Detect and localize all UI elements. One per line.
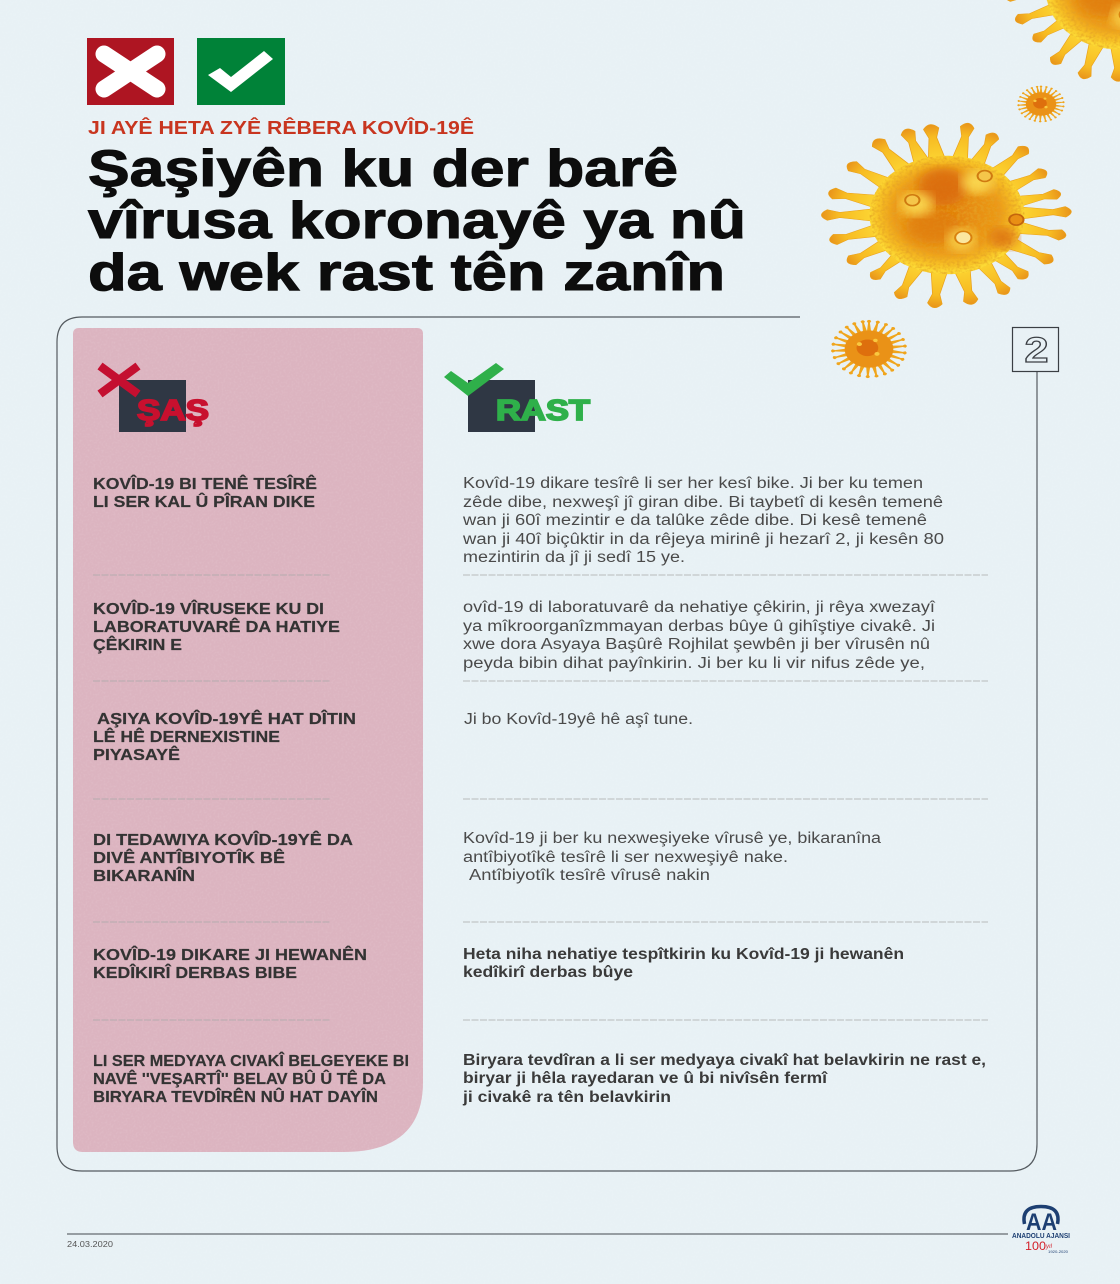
row 1 right: wan ji 40î biçûktir in da rêjeya mirinê ji hezarî 2, ji kesên 80 bbox=[462, 531, 944, 548]
title: da wek rast tên zanîn bbox=[88, 244, 725, 302]
panel: pink wrong column bbox=[73, 328, 423, 1152]
row 6 right: biryar ji hêla rayedaran ve û bi nivîsên fermî bbox=[463, 1070, 828, 1087]
heading: ŞAŞ: ŞAŞ bbox=[137, 395, 209, 427]
row 6 right: Biryara tevdîran a li ser medyaya civakî hat belavkirin ne rast e, bbox=[463, 1052, 986, 1069]
footer line bbox=[67, 1233, 1008, 1235]
row 2 wrong: KOVÎD-19 VÎRUSEKE KU DI bbox=[93, 600, 324, 618]
row 4 wrong: BIKARANÎN bbox=[93, 867, 195, 885]
row 2 right bbox=[463, 599, 936, 672]
row 4 right: Antîbiyotîk tesîrê vîrusê nakin bbox=[469, 867, 710, 884]
icon: virus top right bbox=[980, 0, 1120, 101]
row 6 right: ji civakê ra tên belavkirin bbox=[462, 1089, 671, 1106]
row 3 right: Ji bo Kovîd-19yê hê aşî tune. bbox=[464, 711, 693, 728]
row 3 wrong bbox=[93, 710, 356, 764]
row 1 right: mezintirin da jî ji sedî 15 ye. bbox=[463, 549, 685, 566]
icon: red cross bbox=[87, 38, 174, 105]
icon: green check bbox=[197, 38, 285, 105]
row 5 right: Heta niha nehatiye tespîtkirin ku Kovîd-19 ji hewanên bbox=[463, 946, 904, 963]
logo: Anadolu Ajansi: ANADOLU AJANSI bbox=[1012, 1233, 1070, 1240]
row 6 wrong: BIRYARA TEVDÎRÊN NÛ HAT DAYÎN bbox=[93, 1088, 378, 1106]
row 2 right: ovîd-19 di laboratuvarê da nehatiye çêkirin, ji rêya xwezayî bbox=[463, 599, 936, 616]
row 3 wrong: AŞIYA KOVÎD-19YÊ HAT DÎTIN bbox=[97, 710, 356, 728]
page number box: 2 bbox=[1024, 331, 1048, 370]
row 2 right: peyda bibin dihat payînkirin. Ji ber ku li vir nifus zêde ye, bbox=[463, 655, 925, 672]
row 2 wrong: ÇÊKIRIN E bbox=[93, 636, 182, 654]
icon: virus large bbox=[821, 122, 1072, 308]
row 1 right: wan ji 60î mezintir e da talûke zêde dibe. Di kesê temenê bbox=[462, 512, 927, 529]
logo: Anadolu Ajansi: 1920-2020 bbox=[1048, 1250, 1068, 1254]
row 1 right: Kovîd-19 dikare tesîrê li ser her kesî bike. Ji ber ku temen bbox=[463, 475, 923, 492]
row 4 right: Kovîd-19 ji ber ku nexweşiyeke vîrusê ye, bikaranîna bbox=[463, 830, 881, 847]
title: vîrusa koronayê ya nû bbox=[88, 192, 746, 250]
row 6 wrong: NAVÊ ''VEŞARTÎ'' BELAV BÛ Û TÊ DA bbox=[93, 1070, 386, 1088]
logo: Anadolu Ajansi: 100 bbox=[1025, 1239, 1046, 1253]
row 1 right bbox=[462, 475, 944, 566]
logo: Anadolu Ajansi bbox=[1012, 1206, 1070, 1254]
row 2 right: ya mîkroorganîzmmayan derbas bûye û gihîştiye civakê. Ji bbox=[463, 618, 935, 635]
row 3 wrong: PIYASAYÊ bbox=[93, 746, 180, 764]
heading: RAST: RAST bbox=[496, 395, 590, 427]
title bbox=[88, 140, 746, 302]
row 5 wrong: KOVÎD-19 DIKARE JI HEWANÊN bbox=[93, 946, 367, 964]
row 1 wrong bbox=[93, 475, 317, 511]
row 4 wrong: DI TEDAWIYA KOVÎD-19YÊ DA bbox=[93, 831, 353, 849]
row 6 wrong: LI SER MEDYAYA CIVAKÎ BELGEYEKE BI bbox=[93, 1052, 409, 1070]
heading: ŞAŞ bbox=[100, 366, 209, 432]
page number box bbox=[1012, 328, 1058, 372]
panel frame bbox=[57, 317, 1037, 1171]
heading: RAST bbox=[444, 363, 590, 432]
title: Şaşiyên ku der barê bbox=[88, 140, 678, 198]
row 5 wrong: KEDÎKIRÎ DERBAS BIBE bbox=[93, 964, 297, 982]
logo: Anadolu Ajansi: yıl bbox=[1045, 1244, 1053, 1250]
row 4 wrong bbox=[93, 831, 353, 885]
subtitle: JI AYÊ HETA ZYÊ RÊBERA KOVÎD-19Ê bbox=[88, 117, 474, 138]
row 2 right: xwe dora Asyaya Başûrê Rojhilat şewbên ji ber vîrusên nû bbox=[463, 636, 930, 653]
date: 24.03.2020 bbox=[67, 1239, 113, 1249]
row 4 right bbox=[463, 830, 881, 884]
row 1 wrong: KOVÎD-19 BI TENÊ TESÎRÊ bbox=[93, 475, 317, 493]
row 4 wrong: DIVÊ ANTÎBIYOTÎK BÊ bbox=[93, 849, 285, 867]
row 5 right: kedîkirî derbas bûye bbox=[463, 964, 633, 981]
icon: virus small upper bbox=[1017, 86, 1065, 122]
row 5 right bbox=[463, 946, 904, 981]
icon: virus small lower bbox=[831, 320, 907, 378]
row 1 wrong: LI SER KAL Û PÎRAN DIKE bbox=[93, 493, 315, 511]
row 3 wrong: LÊ HÊ DERNEXISTINE bbox=[93, 728, 280, 746]
row 2 wrong: LABORATUVARÊ DA HATIYE bbox=[93, 618, 340, 636]
row 1 right: zêde dibe, nexweşî jî giran dibe. Bi taybetî di kesên temenê bbox=[463, 494, 943, 511]
row 6 right bbox=[462, 1052, 986, 1106]
logo: Anadolu Ajansi: AA bbox=[1026, 1209, 1057, 1236]
row 6 wrong bbox=[93, 1052, 409, 1106]
row 5 wrong bbox=[93, 946, 367, 982]
row 4 right: antîbiyotîkê tesîrê li ser nexweşiyê nake. bbox=[463, 849, 788, 866]
row 2 wrong bbox=[93, 600, 340, 654]
